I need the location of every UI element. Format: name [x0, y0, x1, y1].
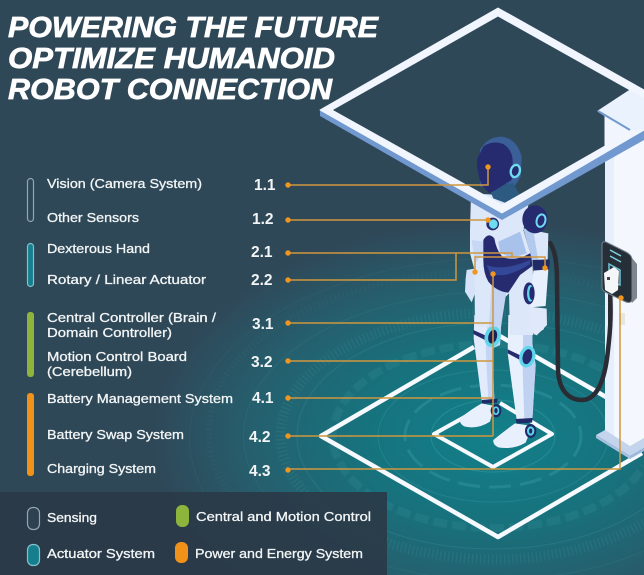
- belly highlight: [487, 260, 530, 275]
- charging cable: [550, 243, 611, 400]
- left hand: [465, 269, 475, 302]
- charger wall box: [602, 242, 637, 325]
- component numbers: [249, 177, 276, 480]
- left leg: [474, 315, 502, 401]
- right hand: [528, 318, 547, 335]
- legend swatch: actuator: [28, 544, 40, 566]
- robot upper body: [465, 193, 550, 335]
- hip joint: [523, 282, 535, 304]
- component numbers: 4.3: [249, 463, 271, 480]
- component labels: [47, 176, 233, 476]
- right foot: [493, 418, 536, 448]
- forearm: [530, 269, 548, 307]
- legend label: sensing: Sensing: [47, 510, 97, 525]
- component numbers: 1.2: [252, 211, 274, 228]
- chest joint: [486, 218, 499, 230]
- component labels: Battery Swap System: [47, 427, 184, 442]
- component labels: (Cerebellum): [47, 364, 132, 379]
- component numbers: 4.2: [249, 429, 271, 446]
- right upper arm: [523, 228, 548, 261]
- right hand: [529, 307, 547, 335]
- legend panel: [0, 492, 387, 575]
- category bar: power: [27, 393, 34, 476]
- legend label: control: Central and Motion Control: [196, 509, 371, 524]
- right knee joint: [508, 344, 538, 369]
- title: [8, 12, 380, 106]
- right leg: [508, 315, 536, 420]
- component labels: Motion Control Board: [47, 349, 187, 364]
- floor inner diamond: [434, 403, 552, 467]
- component labels: Central Controller (Brain /: [47, 310, 216, 325]
- robot lower body: [460, 315, 547, 448]
- component labels: Other Sensors: [47, 210, 140, 225]
- top frame platform: [320, 8, 644, 220]
- legend swatch: sensing: [28, 508, 40, 530]
- torso side shading: [498, 232, 527, 258]
- component numbers: 2.2: [251, 272, 273, 289]
- robot head: [477, 137, 523, 203]
- legend swatch: control: [176, 505, 189, 527]
- left foot: [460, 399, 501, 427]
- component labels: Battery Management System: [47, 391, 233, 406]
- component numbers: 3.1: [252, 316, 274, 333]
- left knee joint: [473, 324, 503, 349]
- category bar: actuator: [28, 244, 34, 286]
- title: OPTIMIZE HUMANOID: [8, 43, 335, 75]
- component labels: Vision (Camera System): [47, 176, 202, 191]
- leader dots: [285, 164, 624, 473]
- legend label: actuator: Actuator System: [47, 546, 155, 561]
- component labels: Domain Controller): [47, 325, 172, 340]
- component labels: Charging System: [47, 461, 156, 476]
- category bar: sensing: [28, 178, 34, 222]
- left torso shading: [472, 240, 483, 263]
- legend swatch: power: [175, 542, 188, 563]
- belly navy panel: [483, 235, 532, 293]
- leader lines: [288, 167, 620, 469]
- component numbers: 3.2: [251, 354, 273, 371]
- category bar: control: [27, 312, 34, 377]
- pillar: [596, 112, 644, 459]
- wrist band: [532, 259, 550, 271]
- title: ROBOT CONNECTION: [8, 74, 333, 106]
- title: POWERING THE FUTURE: [8, 12, 380, 44]
- component numbers: 2.1: [251, 244, 273, 261]
- legend label: power: Power and Energy System: [195, 546, 363, 561]
- component labels: Rotary / Linear Actuator: [47, 272, 207, 287]
- floor outer diamond: [321, 335, 642, 537]
- left leg shading: [489, 280, 507, 327]
- component labels: Dexterous Hand: [47, 241, 150, 256]
- component numbers: 4.1: [252, 390, 274, 407]
- background tech rings: [190, 258, 644, 575]
- torso and left arm: [470, 193, 533, 335]
- component numbers: 1.1: [254, 177, 276, 194]
- right shoulder: [522, 205, 548, 233]
